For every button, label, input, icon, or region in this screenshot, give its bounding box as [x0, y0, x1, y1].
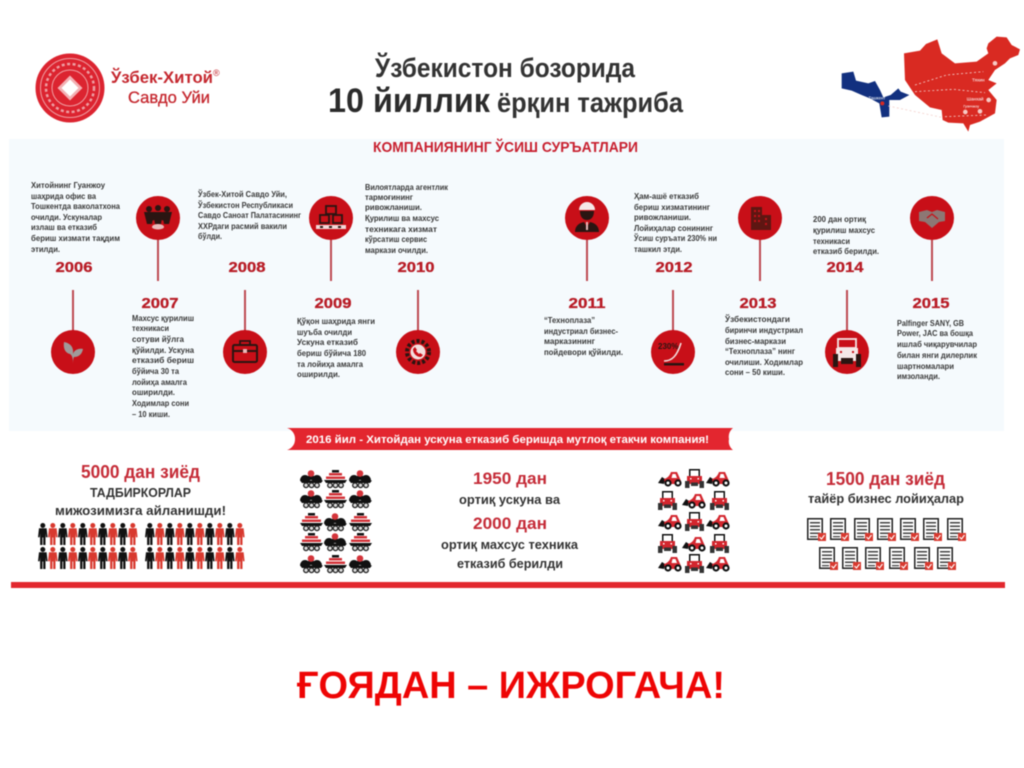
icons: people — [38, 523, 245, 569]
title line 2 bold: 10 йиллик — [328, 82, 491, 120]
caption: special machinery: ортиқ махсус техника — [441, 537, 579, 552]
map: Guangzhou label: Гуанчжоу — [963, 104, 979, 108]
year: 2011: 2011 — [568, 295, 606, 312]
text: 2013: сони – 50 киши. — [725, 368, 785, 377]
text: 2007: бўйича 30 та — [132, 367, 180, 376]
text: 2015: Power, JAC ва бошқа — [897, 329, 974, 338]
timeline: 2006 — [31, 181, 121, 374]
icon: 230% growth chart — [651, 330, 695, 374]
stat caption: мижозимизга айланишди! — [55, 503, 226, 518]
year: 2013: 2013 — [740, 295, 776, 312]
year: 2006: 2006 — [56, 259, 92, 276]
timeline: 2007 — [132, 196, 195, 419]
text: 2006: шаҳрида офис ва — [31, 192, 97, 201]
icon: boxes on pallet — [309, 196, 353, 240]
stat number: 5000 дан зиёд — [81, 462, 201, 482]
text: 2012: бериш хизматининг — [634, 203, 711, 212]
icons: tractor grid — [658, 469, 730, 573]
text: 2006: этилди. — [31, 245, 60, 254]
map: route lines — [888, 72, 987, 117]
text: 2007: лойиҳа амалга — [132, 378, 188, 387]
stat number: 1500 дан зиёд — [826, 469, 946, 489]
text: 2008: Ўзбекистон Республикаси — [197, 201, 293, 210]
text: 2014: қурилиш махсус — [813, 226, 876, 235]
text: 2007: қўйилди. Ускуна — [132, 346, 195, 355]
icon: red coin — [36, 54, 104, 122]
year: 2009: 2009 — [314, 295, 352, 312]
map: Shanghai label: Шанхай — [967, 95, 984, 101]
logo wordmark line 2: Савдо Уйи — [128, 89, 210, 107]
text: 2008: Савдо Саноат Палатасининг — [198, 211, 302, 220]
text: 2008: бўлди. — [198, 232, 222, 241]
text: 2015: имзоланди. — [897, 372, 940, 381]
text: 2006 — [31, 181, 121, 254]
text: 2012: Ўсиш суръати 230% ни — [633, 234, 717, 243]
text: 2012 — [633, 192, 717, 254]
icon: 230% growth chart: 230% — [658, 342, 678, 351]
logo: Uzbek-China Trade House — [36, 54, 220, 122]
timeline: 2010 — [365, 183, 449, 374]
timeline: 2013 — [724, 196, 803, 377]
text: 2010: Қурилиш ва махсус — [365, 214, 440, 223]
banner text: 2016 йил - Хитойдан ускуна етказиб беришда мутлоқ етакчи компания! — [306, 434, 709, 446]
text: 2014 — [813, 215, 879, 256]
text: 2006: Хитойнинг Гуанжоу — [31, 181, 106, 190]
icon: building — [738, 196, 782, 240]
stat: business projects — [807, 469, 966, 570]
timeline: 2012 — [633, 192, 717, 374]
text: 2007: – 10 киши. — [132, 410, 170, 419]
text: 2009 — [297, 317, 375, 379]
icon: handshake — [910, 196, 954, 240]
text: 2010: Вилоятларда агентлик — [365, 183, 449, 192]
text: 2007: оширилди. — [132, 388, 175, 397]
icons: machinery grid — [300, 470, 372, 573]
icons: documents — [807, 518, 966, 570]
text: 2013: “Техноплаза” нинг — [725, 347, 796, 356]
text: 2007: Ходимлар сони — [132, 399, 189, 408]
timeline: 2015 — [897, 196, 978, 381]
title — [328, 51, 683, 120]
red footer bar — [11, 582, 1005, 588]
text: 2014: техникаси — [813, 237, 850, 246]
text: 2009: та лойиҳа амалга — [297, 360, 364, 369]
icon: tractor — [825, 330, 869, 374]
map: Tianjin label: Тяхин — [972, 78, 985, 83]
stat: entrepreneurs — [38, 462, 245, 569]
text: 2011: марказининг — [544, 337, 596, 346]
caption: delivered: етказиб берилди — [457, 556, 563, 571]
text: 2007: етказиб бериш — [132, 356, 194, 365]
text: 2007: техникаси — [132, 324, 169, 333]
text: 2015 — [897, 319, 978, 381]
text: 2010: кўрсатиш сервис — [365, 235, 427, 244]
text: 2015: ишлаб чиқарувчилар — [897, 340, 977, 349]
text: 2015: Palfinger SANY, GB — [897, 319, 964, 328]
text: 2013: бизнес-маркази — [725, 337, 786, 346]
map: China — [904, 37, 1020, 132]
text: 2011: пойдевори қўйилди. — [544, 348, 623, 357]
text: 2012: Ҳам-ашё етказиб — [634, 192, 699, 201]
map: city markers — [963, 61, 997, 114]
text: 2008 — [197, 190, 302, 241]
timeline: 2009 — [297, 196, 375, 379]
text: 2007: Махсус қурилиш — [132, 314, 194, 323]
title line 1: Ўзбекистон бозорида — [374, 51, 636, 83]
text: 2011 — [544, 316, 623, 357]
text: 2006: излаш ва етказиб — [31, 223, 97, 232]
icon: team — [136, 196, 180, 240]
text: 2013: очилиши. Ходимлар — [725, 358, 803, 367]
year: 2010: 2010 — [398, 259, 434, 276]
text: 2012: ривожланиши. — [634, 213, 691, 222]
text: 2006: Тошкентда ваколатхона — [31, 202, 121, 211]
stat label: ТАДБИРКОРЛАР — [90, 485, 191, 500]
slogan: ҒОЯДАН – ИЖРОГАЧА! — [297, 665, 725, 707]
background panel: company growth timeline — [9, 139, 1004, 431]
text: 2009: оширилди. — [297, 370, 340, 379]
icon: leaf — [51, 330, 95, 374]
text: 2013: Ўзбекистондаги — [724, 315, 790, 324]
text: 2009: Қўқон шаҳрида янги — [297, 317, 375, 326]
timeline: 2014 — [813, 215, 879, 374]
caption: equipment: ортиқ ускуна ва — [459, 492, 561, 507]
stat number: 2000: 2000 дан — [473, 514, 547, 533]
text: 2006: очилди. Ускуналар — [31, 213, 102, 222]
map: Uzbekistan to China — [842, 37, 1020, 132]
text: 2010 — [365, 183, 449, 255]
text: 2008: Ўзбек-Хитой Савдо Уйи, — [197, 190, 287, 199]
text: 2015: билан янги дилерлик — [897, 351, 978, 360]
text: 2007: сотуви йўлга — [132, 335, 185, 344]
timeline: 2008 — [197, 190, 302, 374]
logo wordmark line 1: Ўзбек-Хитой — [110, 67, 213, 87]
registered mark: ® — [213, 68, 220, 78]
title line 2 rest: ёрқин тажриба — [497, 87, 683, 118]
text: 2011: “Техноплаза” — [544, 316, 595, 325]
text: 2010: маркази очилди. — [365, 246, 428, 255]
year: 2007: 2007 — [142, 295, 178, 312]
banner: 2016 — [287, 428, 733, 450]
map: Tashkent marker — [880, 101, 884, 105]
icon: gear with phone — [396, 330, 440, 374]
year: 2015: 2015 — [912, 295, 950, 312]
text: 2015: шартномалари — [897, 362, 954, 371]
text: 2009: Ускуна етказиб — [297, 338, 358, 347]
year: 2014: 2014 — [826, 259, 864, 276]
text: 2013: биринчи индустриал — [725, 326, 803, 335]
timeline: 2011 — [544, 196, 623, 357]
section heading: КОМПАНИЯНИНГ ЎСИШ СУРЪАТЛАРИ — [373, 138, 638, 156]
text: 2012: ташкил этди. — [634, 245, 682, 254]
text: 2006: бериш хизмати тақдим — [31, 234, 120, 243]
text: 2007 — [132, 314, 195, 419]
year: 2012: 2012 — [656, 259, 692, 276]
text: 2014: етказиб берилди. — [813, 247, 879, 256]
text: 2010: ривожланиши. — [365, 203, 422, 212]
text: 2011: индустриал бизнес- — [544, 327, 618, 336]
text: 2010: техникага хизмат — [365, 225, 437, 234]
stat caption: тайёр бизнес лойиҳалар — [808, 491, 964, 506]
stat number: 1950: 1950 дан — [473, 469, 547, 488]
text: 2013 — [724, 315, 803, 377]
map: Tashkent label: Ташкент — [868, 95, 885, 100]
text: 2010: тармоғининг — [365, 193, 414, 202]
icon: worker — [565, 196, 609, 240]
text: 2009: шуъба очилди — [297, 328, 352, 337]
text: 2008: ХХРдаги расмий вакили — [198, 222, 287, 231]
icon: briefcase — [223, 330, 267, 374]
text: 2009: бериш бўйича 180 — [297, 349, 367, 358]
text: 2012: Лойиҳалар сонининг — [634, 224, 714, 233]
map: Uzbekistan — [842, 72, 909, 117]
stat: equipment — [441, 469, 579, 571]
year: 2008: 2008 — [228, 259, 266, 276]
text: 2014: 200 дан ортиқ — [813, 215, 866, 224]
